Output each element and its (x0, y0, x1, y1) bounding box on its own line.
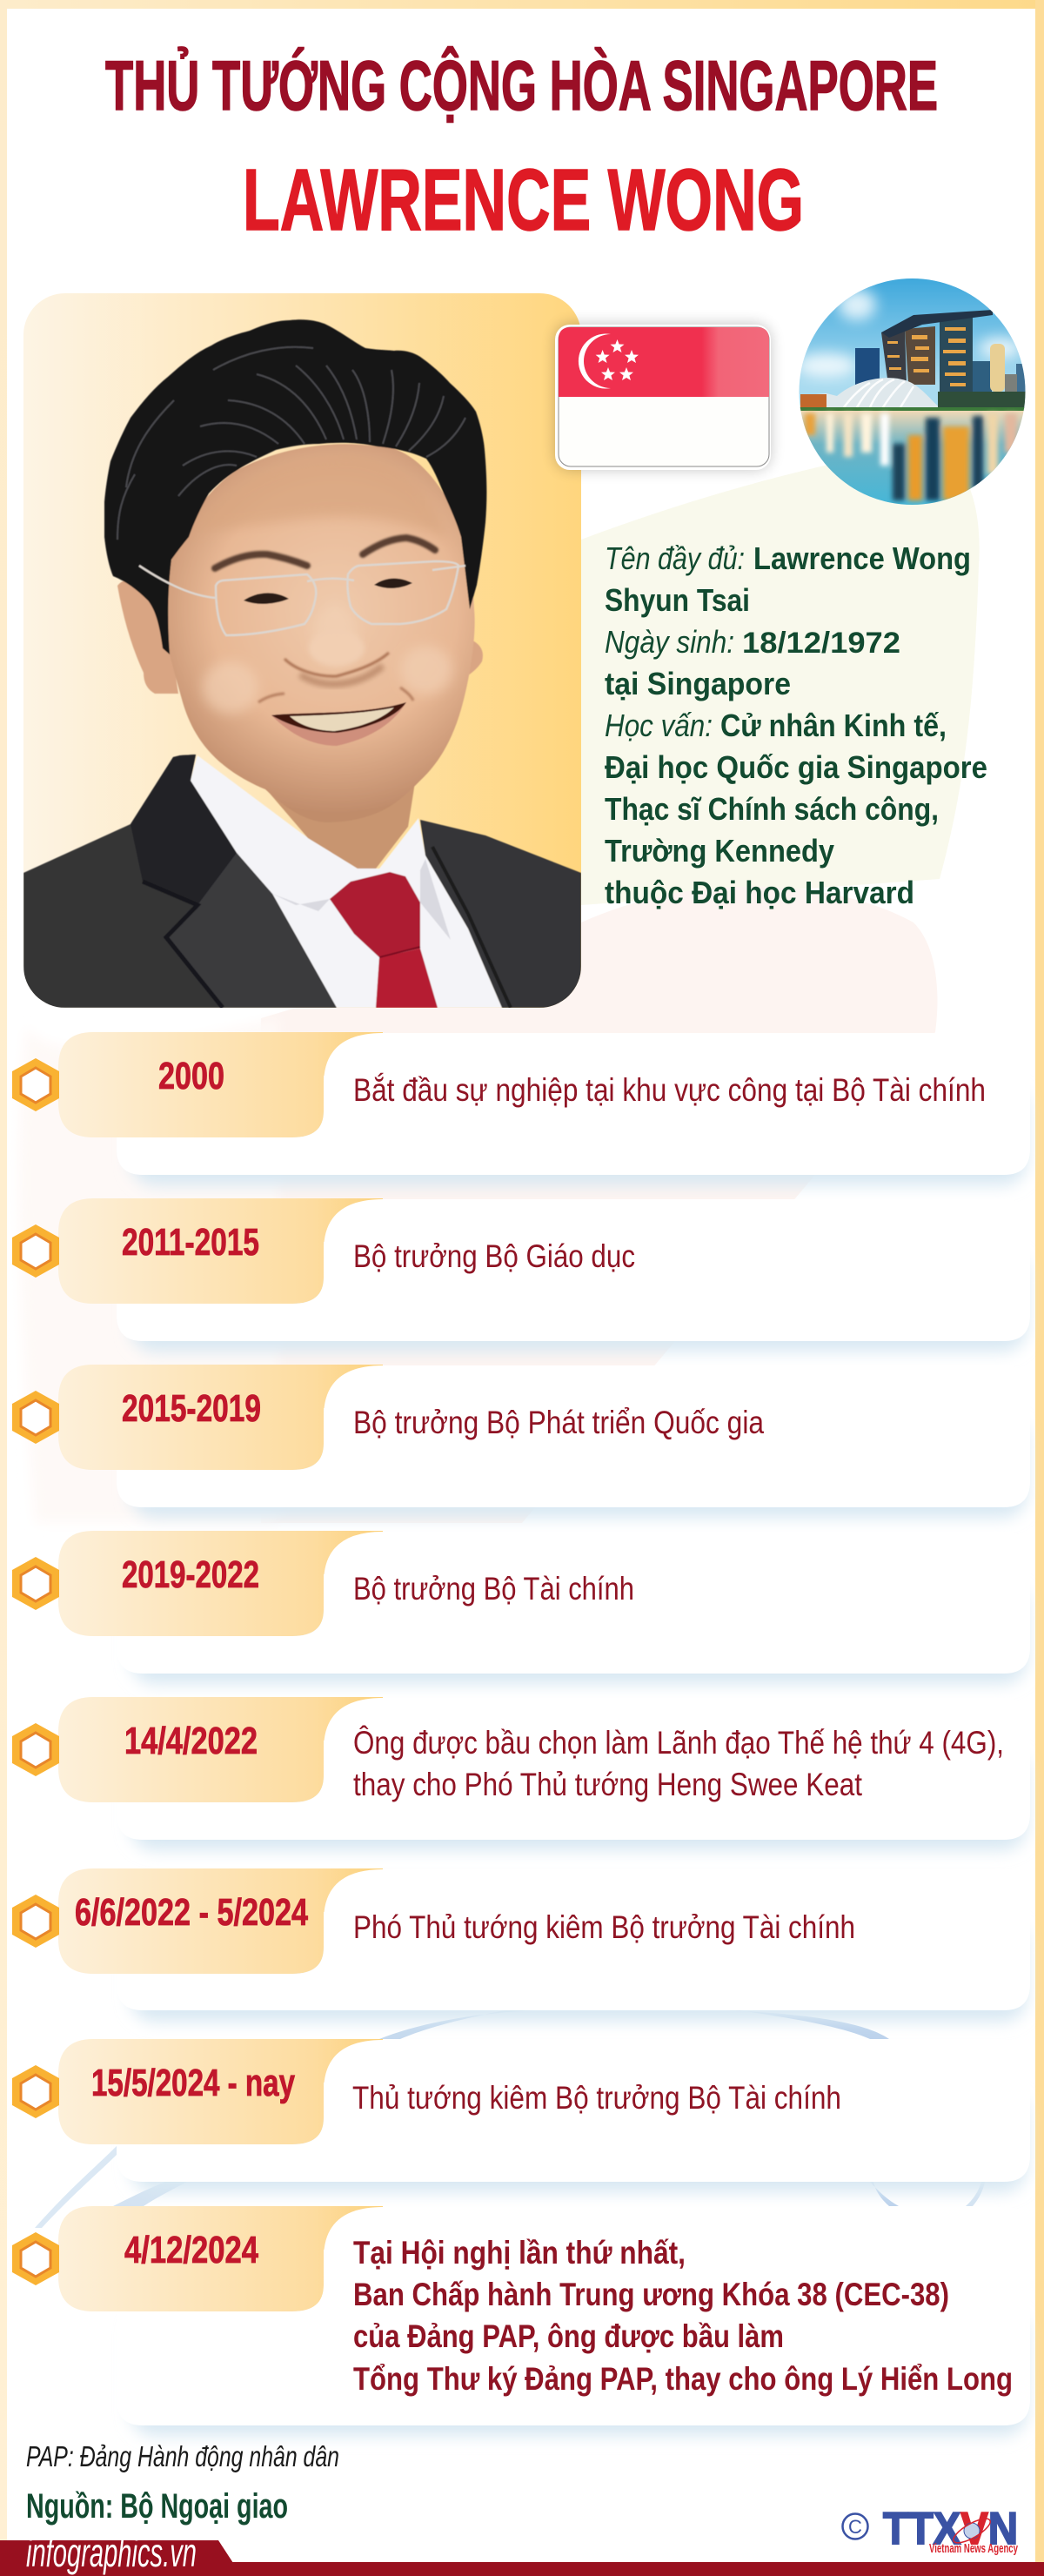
year label: 2019-2022 (122, 1553, 259, 1596)
flag frame (555, 325, 771, 470)
description (353, 1725, 1004, 1802)
card shadow (130, 2091, 1027, 2192)
timeline row: 2000 (12, 1032, 1030, 1185)
copyright mark: C (848, 2516, 862, 2538)
year label: 14/4/2022 (124, 1720, 258, 1762)
timeline row: 6/6/2022 - 5/2024 (12, 1868, 1030, 2022)
timeline row: 2019-2022 (12, 1531, 1030, 1684)
flag stars (596, 339, 639, 380)
portrait: face (163, 444, 475, 822)
education: Học vấn: (605, 708, 713, 743)
card (117, 1532, 1030, 1674)
hexagon marker (12, 1895, 59, 1948)
globe swirl (950, 2514, 994, 2547)
portrait: cheek lines (258, 688, 413, 702)
portrait: left upper lapel (130, 755, 237, 905)
portrait: ears (117, 580, 483, 694)
description: Ban Chấp hành Trung ương Khóa 38 (CEC-38) (353, 2277, 949, 2312)
year label: 2000 (158, 1055, 224, 1097)
bio text block: thuộc Đại học Harvard (605, 875, 914, 910)
Marina Bay Sands hotel (881, 310, 993, 393)
year label: 2015-2019 (122, 1387, 261, 1430)
timeline row: 14/4/2022 (12, 1697, 1030, 1850)
source: Nguồn: Bộ Ngoại giao (26, 2487, 288, 2526)
bio text block: Lawrence Wong (753, 540, 971, 576)
bio text block: Trường Kennedy (605, 833, 834, 869)
portrait: neck (261, 766, 418, 869)
panel: portrait photo (23, 293, 581, 1008)
hexagon marker (12, 2065, 59, 2118)
card (117, 2040, 1030, 2182)
portrait: shirt (191, 755, 502, 1008)
copyright mark (842, 2513, 868, 2539)
card (117, 2207, 1030, 2425)
title line 2: name: LAWRENCE WONG (243, 151, 804, 249)
portrait: suit body left (23, 755, 337, 1008)
description: Thủ tướng kiêm Bộ trưởng Bộ Tài chính (352, 2080, 841, 2116)
skyline towers (855, 344, 1027, 392)
card shadow (130, 2311, 1027, 2436)
description: Bộ trưởng Bộ Phát triển Quốc gia (353, 1405, 764, 1440)
year tab (58, 2039, 383, 2144)
description: Tại Hội nghị lần thứ nhất, (353, 2235, 686, 2271)
portrait: hair (104, 319, 486, 654)
clouds (796, 289, 1022, 378)
portrait: left lower lapel (166, 853, 337, 1008)
card (117, 1199, 1030, 1341)
card (117, 1033, 1030, 1175)
bio text block: Thạc sĩ Chính sách công, (605, 791, 939, 827)
dome and shore (799, 378, 941, 409)
portrait: smile (271, 702, 406, 746)
portrait: hair strands (117, 347, 465, 540)
timeline row: 4/12/2024 (12, 2206, 1030, 2436)
year label: 6/6/2022 - 5/2024 (75, 1891, 308, 1934)
card (117, 1869, 1030, 2010)
year tab (58, 1868, 383, 1974)
year tab (58, 1032, 383, 1137)
timeline row: 2015-2019 (12, 1365, 1030, 1518)
year tab (58, 1198, 383, 1304)
year tab (58, 1531, 383, 1636)
city photo: Marina Bay Sands (796, 278, 1027, 506)
bottom bar (0, 2540, 1044, 2576)
portrait: eyes (244, 579, 412, 604)
portrait: glasses (139, 561, 465, 635)
flag crescent (579, 334, 611, 388)
bio text block: Shyun Tsai (605, 582, 750, 618)
hexagon marker (12, 1391, 59, 1444)
hexagon marker (12, 1058, 59, 1111)
bio text block: 18/12/1972 (742, 627, 900, 660)
year label: 4/12/2024 (124, 2229, 258, 2271)
TTXVN logo (842, 2504, 1018, 2556)
bio text block: tại Singapore (605, 666, 791, 701)
flag shadow (555, 324, 771, 470)
portrait: right lapel line (432, 847, 511, 1008)
date of birth: Ngày sinh: (605, 624, 734, 660)
hexagon marker (12, 2232, 59, 2285)
flag red band (559, 327, 769, 397)
year tab (58, 1365, 383, 1470)
title (105, 46, 938, 249)
card shadow (130, 1251, 1027, 1352)
card shadow (130, 1749, 1027, 1850)
portrait: forehead tone (224, 443, 439, 533)
portrait: suit body right (420, 820, 581, 1008)
card shadow (130, 1921, 1027, 2022)
TTXVN wordmark: TTXVN (883, 2504, 1018, 2554)
bio text block (605, 540, 987, 910)
description: của Đảng PAP, ông được bầu làm (353, 2318, 784, 2354)
year tab (58, 2206, 383, 2311)
card shadow (130, 1583, 1027, 1684)
description: Bộ trưởng Bộ Giáo dục (353, 1238, 635, 1274)
background decorative shapes (18, 448, 985, 2228)
description (353, 2235, 1013, 2397)
footnote: PAP: Đảng Hành động nhân dân (26, 2440, 339, 2472)
card shadow (130, 1417, 1027, 1518)
hexagon marker (12, 1723, 59, 1776)
portrait: tie (330, 872, 438, 1008)
timeline row: 2011-2015 (12, 1198, 1030, 1352)
bio text block: Cử nhân Kinh tế, (720, 708, 947, 743)
website label: infographics.vn (26, 2530, 197, 2575)
flag of Singapore (555, 324, 771, 470)
portrait: eyebrows (215, 538, 435, 568)
timeline row: 15/5/2024 - nay (12, 2039, 1030, 2192)
water with reflections (799, 411, 1027, 506)
hexagon marker (12, 1557, 59, 1610)
portrait: nose (284, 631, 389, 684)
description: thay cho Phó Thủ tướng Heng Swee Keat (353, 1767, 863, 1802)
year label: 2011-2015 (122, 1221, 259, 1264)
portrait: shirt collar shade (272, 859, 451, 940)
hexagon marker (12, 1224, 59, 1278)
portrait: cheek highlights (199, 623, 454, 717)
portrait: lapel edge (143, 882, 223, 1008)
card shadow (130, 1084, 1027, 1185)
card (117, 1698, 1030, 1840)
year label: 15/5/2024 - nay (91, 2062, 295, 2104)
bio text block: Đại học Quốc gia Singapore (605, 749, 987, 785)
year tab (58, 1697, 383, 1802)
description: Bộ trưởng Bộ Tài chính (353, 1571, 634, 1607)
description: Phó Thủ tướng kiêm Bộ trưởng Tài chính (353, 1909, 855, 1945)
card (117, 1365, 1030, 1507)
full name: Tên đầy đủ: (605, 540, 745, 576)
globe (964, 2523, 980, 2539)
